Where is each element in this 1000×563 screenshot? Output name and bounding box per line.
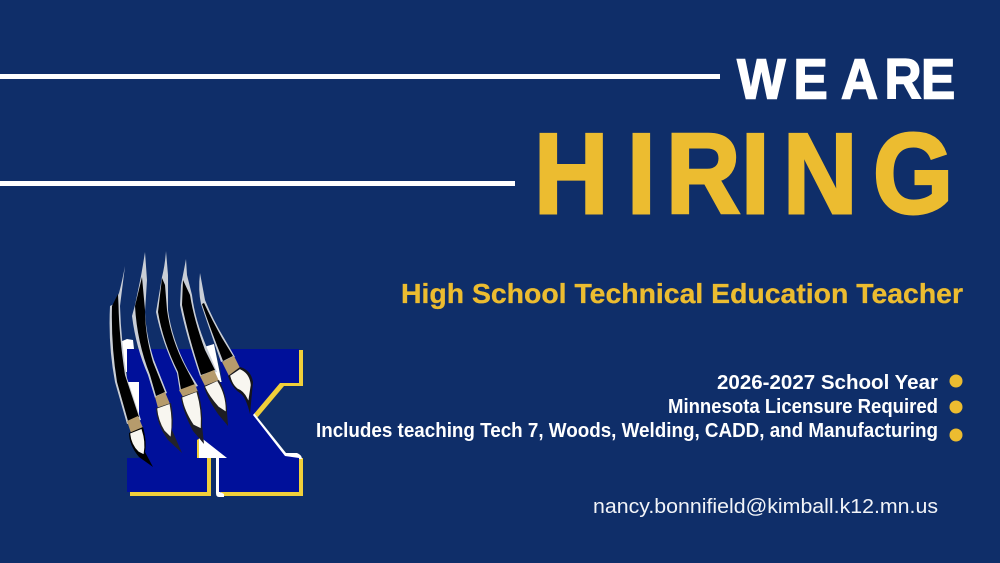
K yellow shadow: [130, 350, 303, 496]
claw 1: [110, 266, 153, 467]
contact email: nancy.bonnifield@kimball.k12.mn.us: [593, 496, 938, 518]
claw 5: [199, 273, 253, 414]
claw 3: [156, 251, 204, 444]
heading: we are: WE ARE: [737, 48, 955, 111]
bullet 3: [950, 428, 962, 442]
bottom rule: [0, 181, 515, 186]
detail: school year: 2026-2027 School Year: [717, 372, 938, 394]
detail: courses: Includes teaching Tech 7, Woods, Welding, CADD, and Manufacturing: [316, 420, 938, 442]
top rule: [0, 74, 720, 79]
bullet 2: [950, 400, 962, 414]
claw 2: [132, 252, 182, 453]
logo: clawed K: [110, 251, 303, 497]
K white outline: [120, 339, 302, 497]
bullet 1: [950, 374, 962, 388]
detail: licensure: Minnesota Licensure Required: [668, 396, 938, 418]
job title: High School Technical Education Teacher: [401, 278, 963, 309]
K blue letter: [127, 349, 299, 492]
job details list: [316, 372, 962, 442]
claw 4: [180, 259, 228, 426]
white cut in K: [199, 436, 227, 458]
heading: hiring: HIRING: [534, 110, 953, 238]
